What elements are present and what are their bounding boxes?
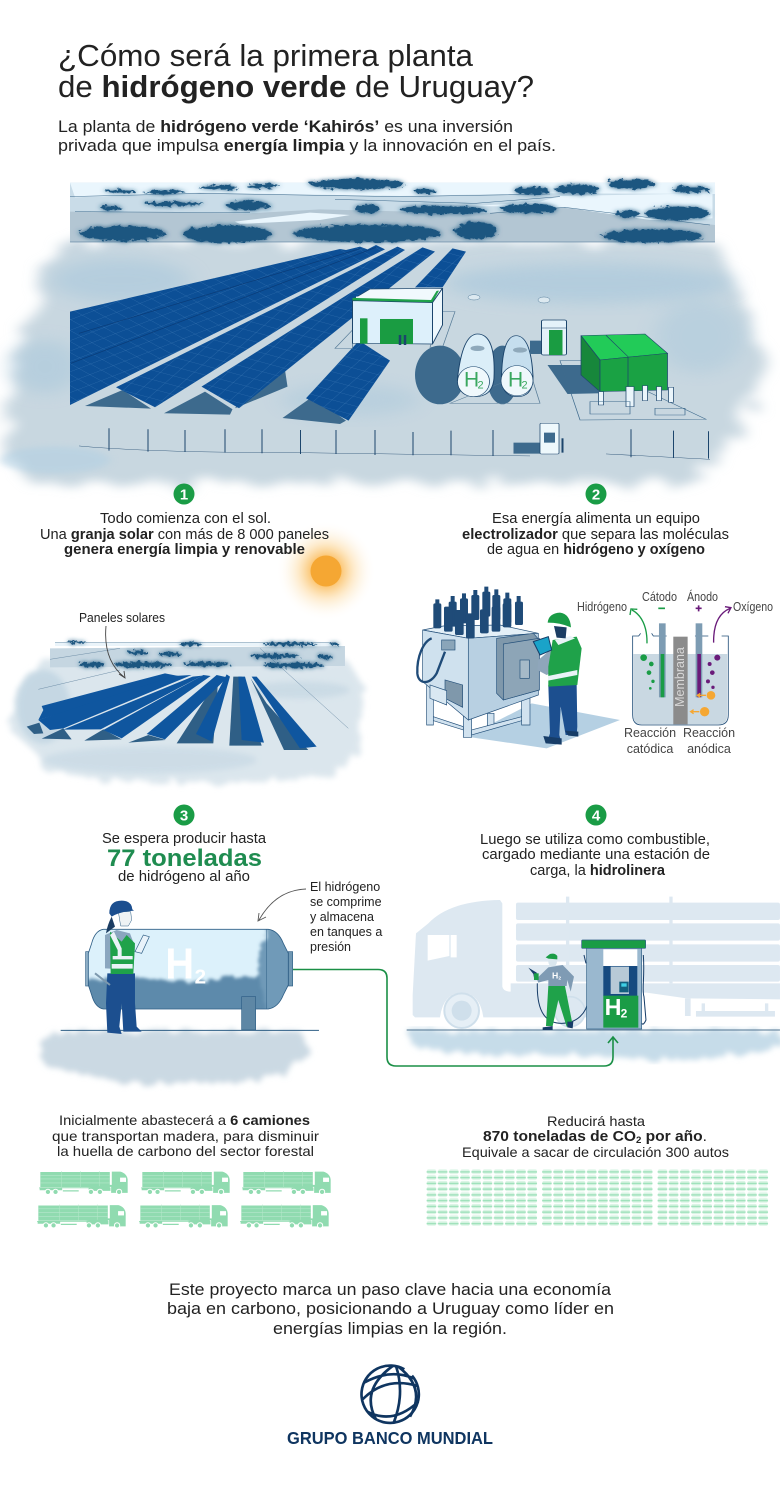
solar panel shadows (85, 370, 346, 424)
electrolyser body (423, 625, 539, 720)
step 4 text: cargado mediante una estación de (482, 847, 710, 863)
hydrogen tanks: 2 (522, 380, 528, 392)
CO2 text: 2 (636, 1135, 641, 1145)
World Bank logo: GRUPO BANCO MUNDIAL (287, 1428, 493, 1448)
step badge 3: 3 (180, 808, 188, 824)
hydrogen tanks: H (464, 369, 479, 392)
callout: tank: en tanques a (310, 925, 382, 939)
subtitle: privada que impulsa energía limpia y la innovación en el país. (58, 136, 556, 155)
fuel pump: H (605, 994, 622, 1020)
green pipe arrow (293, 970, 618, 1066)
step 1 text: Todo comienza con el sol. (100, 511, 271, 527)
control building (335, 288, 455, 348)
vessel (633, 633, 728, 725)
cell labels: Oxígeno (733, 600, 773, 614)
trucks text: Inicialmente abastecerá a 6 camiones (59, 1112, 310, 1128)
solar panels (70, 245, 466, 421)
perimeter fence (79, 428, 710, 459)
step 2 text: Esa energía alimenta un equipo (492, 511, 700, 527)
electron and proton arrows (691, 691, 715, 716)
hero illustration: hydrogen plant (0, 179, 765, 483)
hydrogen tanks (415, 334, 540, 404)
closing statement: energías limpias en la región. (273, 1319, 507, 1338)
step 4 text: Luego se utiliza como combustible, (480, 832, 710, 848)
truck silhouette (413, 897, 780, 1017)
small cabin and rocks (468, 295, 566, 355)
CO2 text: . (703, 1129, 707, 1145)
six truck icons (37, 1171, 331, 1228)
step 4 text (480, 832, 710, 879)
hydrogen tanks: 2 (478, 380, 484, 392)
watercolor ground (0, 242, 765, 483)
trucks text (52, 1112, 319, 1159)
fuel pump: 2 (621, 1007, 628, 1021)
solar farm illustration (10, 641, 365, 783)
ground shadow (467, 703, 620, 748)
tank: H (165, 940, 194, 988)
cell labels: Membrana (673, 647, 687, 707)
solar panels (38, 673, 317, 748)
landscape horizon band (70, 183, 715, 242)
step 2 text (462, 511, 729, 558)
step badge 2 (586, 484, 606, 504)
polarity signs (658, 605, 702, 611)
label: paneles solares (79, 611, 165, 678)
bushes (80, 179, 710, 243)
bubbles (640, 654, 655, 690)
electrolyser containers (548, 334, 706, 420)
cell labels: Reacción (683, 726, 735, 740)
cell labels: Cátodo (642, 590, 677, 604)
step 2 text: de agua en hidrógeno y oxígeno (487, 542, 705, 558)
CO2 text: por año (641, 1129, 703, 1145)
step 1 text (40, 511, 329, 558)
callout: tank: se comprime (310, 895, 382, 909)
step badge 2: 2 (592, 486, 600, 504)
step badge 4: 4 (592, 808, 601, 824)
CO2 text (462, 1113, 729, 1160)
step badge 1: 1 (180, 486, 188, 504)
gas arrows (630, 607, 731, 643)
ground wash (407, 1031, 780, 1060)
hose (537, 983, 588, 1023)
watercolor ground (10, 660, 365, 783)
panel shadows (27, 677, 308, 750)
trucks text: que transportan madera, para disminuir (52, 1128, 319, 1144)
station worker: H (552, 970, 558, 980)
ground line (61, 1029, 319, 1032)
cell labels: Hidrógeno (577, 600, 627, 614)
trucks text: la huella de carbono del sector forestal (57, 1143, 314, 1159)
step 3 text: de hidrógeno al año (118, 869, 250, 885)
cell labels: Ánodo (687, 589, 718, 604)
fuel pump (582, 940, 646, 1029)
step badge 3 (174, 804, 194, 826)
step 4 text: carga, la hidrolinera (530, 863, 666, 879)
station worker (528, 954, 574, 1030)
electrolyser with worker (417, 587, 620, 748)
step 3 text: Se espera producir hasta (102, 831, 267, 847)
station worker: 2 (558, 975, 561, 981)
CO2 text: Reducirá hasta (547, 1113, 645, 1129)
CO2 text: Equivale a sacar de circulación 300 autos (462, 1144, 729, 1160)
ground line (407, 1028, 780, 1031)
storage tank with worker (38, 901, 319, 1083)
bushings (433, 587, 523, 638)
World Bank logo (287, 1366, 493, 1448)
CO2 text: 870 toneladas de CO (483, 1129, 626, 1145)
worker (533, 613, 582, 745)
subtitle (58, 117, 556, 155)
step badge 4 (586, 804, 606, 826)
sun (276, 521, 376, 621)
callout: tank (258, 880, 382, 954)
closing statement: baja en carbono, posicionando a Uruguay como líder en (167, 1299, 614, 1318)
callout: tank: El hidrógeno (310, 880, 380, 894)
callout: tank: y almacena (310, 910, 374, 924)
step badge 1 (174, 484, 194, 504)
closing statement: Este proyecto marca un paso clave hacia una economía (169, 1280, 612, 1299)
label: paneles solares: Paneles solares (79, 611, 165, 625)
title (58, 38, 534, 104)
electrodes (659, 623, 702, 697)
step 2 text: electrolizador que separa las moléculas (462, 527, 729, 543)
electrolyser frame (427, 682, 530, 737)
cell labels: anódica (687, 742, 731, 756)
title: de hidrógeno verde de Uruguay? (58, 69, 534, 104)
step 1 text: genera energía limpia y renovable (64, 542, 305, 558)
cell labels: Reacción (624, 726, 676, 740)
cell labels: catódica (627, 742, 673, 756)
ground wash (38, 1031, 310, 1083)
closing statement (167, 1280, 614, 1338)
globe icon (362, 1366, 419, 1423)
step 3 text (102, 831, 267, 885)
tank (83, 927, 297, 1030)
worker (95, 901, 149, 1034)
hydrogen tanks: H (508, 369, 523, 392)
step 3 text: 77 toneladas (107, 845, 262, 872)
tank: 2 (195, 965, 206, 988)
300 car icons grid (426, 1169, 769, 1226)
subtitle: La planta de hidrógeno verde ‘Kahirós’ es una inversión (58, 117, 513, 136)
cell labels (577, 589, 773, 756)
horizon band (38, 641, 348, 728)
step 1 text: Una granja solar con más de 8 000 paneles (40, 527, 329, 543)
title: ¿Cómo será la primera planta (58, 38, 474, 73)
electrolysis cell diagram (630, 605, 731, 725)
truck and hydrogen station (407, 897, 780, 1060)
refuelling dispenser (514, 423, 562, 454)
callout: tank: presión (310, 940, 351, 954)
